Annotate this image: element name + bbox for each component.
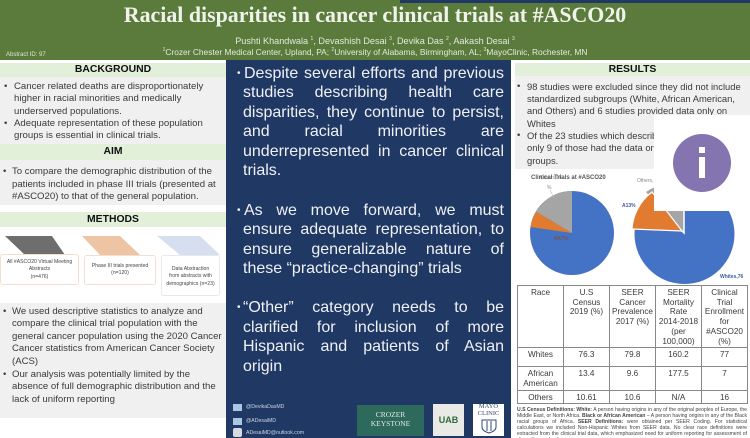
results text: 98 studies were excluded since they did not include xyxy=(527,80,741,92)
aim text: • xyxy=(3,166,6,177)
methods text: absence of full demographic distribution and the xyxy=(12,381,216,392)
panel: left column xyxy=(0,63,226,418)
background text: • xyxy=(4,81,7,92)
leader line xyxy=(550,190,554,198)
results text: • xyxy=(517,80,520,92)
background heading: BACKGROUND xyxy=(75,64,151,75)
aim heading: AIM xyxy=(103,146,123,157)
bullet one: Despite several efforts and previous xyxy=(244,64,504,82)
affiliations: 1Crozer Chester Medical Center, Upland, PA; 2University of Alabama, Birmingham, AL; 3MayoClinic, Rochester, MN xyxy=(163,47,587,57)
data table: 13.4 xyxy=(579,369,594,378)
flow diagram xyxy=(0,236,220,296)
background heading xyxy=(0,63,226,77)
data table: Mortality xyxy=(663,298,694,307)
header banner xyxy=(0,0,750,60)
results heading xyxy=(515,63,750,76)
results heading: RESULTS xyxy=(609,64,656,75)
background text: Adequate representation of these population xyxy=(14,118,203,129)
pie label: AA7% xyxy=(554,236,568,242)
methods text: • xyxy=(3,306,6,316)
aim text: patients included in phase III trials (presented at xyxy=(12,178,216,190)
results text: only 9 of those had the data on all three xyxy=(527,142,692,153)
bullet two: ensure generalizable nature of xyxy=(243,240,504,258)
data table: Prevalence xyxy=(612,307,653,316)
bullet three: • xyxy=(237,302,241,313)
methods text: (ACS) xyxy=(12,356,38,367)
background text: underserved populations. xyxy=(14,106,122,117)
contact block xyxy=(233,404,304,437)
data table: 10.61 xyxy=(576,393,597,402)
data table: Clinical xyxy=(711,288,738,297)
bullet three: origin xyxy=(243,358,282,374)
methods text: general cancer population using the 2020 Cancer xyxy=(12,331,222,342)
logo: crozer keystone: KEYSTONE xyxy=(371,419,410,428)
data table: 7 xyxy=(722,369,727,378)
methods text: We used descriptive statistics to analyze and xyxy=(12,306,203,316)
data table: 177.5 xyxy=(668,369,689,378)
results text: standardized subgroups (White, African American, xyxy=(527,93,735,104)
background text: • xyxy=(4,118,7,129)
methods heading xyxy=(0,212,226,227)
data table: Race xyxy=(531,288,550,297)
data table: 2017 (%) xyxy=(616,317,649,326)
data table: U.S xyxy=(580,288,593,297)
methods text xyxy=(0,303,226,418)
data table: 79.8 xyxy=(625,350,640,359)
bullet one xyxy=(237,64,504,179)
results text: Whites xyxy=(527,118,556,129)
authors: Pushti Khandwala 1, Devashish Desai 3, Devika Das 2, Aakash Desai 3 xyxy=(235,36,515,46)
email address: ADesaiMD@outlook.com xyxy=(246,430,304,436)
panel: results xyxy=(515,63,750,169)
bullet two xyxy=(237,202,504,277)
background text: Cancer related deaths are disproportionately xyxy=(14,81,203,92)
data table: American xyxy=(523,379,558,388)
data table: Cancer xyxy=(619,298,646,307)
bullet one: underrepresented in cancer clinical xyxy=(243,142,504,160)
step 1 box xyxy=(0,254,79,285)
top blue strip xyxy=(400,0,750,3)
data table: SEER xyxy=(621,288,644,297)
icon: twitter two xyxy=(233,418,242,425)
handle one: @DevikaDasMD xyxy=(246,404,284,410)
bullet one: disparities, they continue to persist, xyxy=(243,104,504,120)
results text: • xyxy=(517,130,520,141)
data table: 76.3 xyxy=(579,350,594,359)
background text: groups is essential in clinical trials. xyxy=(14,130,161,141)
popup: info icon xyxy=(654,115,750,211)
data table: Enrollment xyxy=(705,307,744,316)
logo: mayo clinic xyxy=(473,404,504,436)
data table: 160.2 xyxy=(668,350,689,359)
data table: Others xyxy=(528,393,553,402)
bullet three: clarified for inclusion of more xyxy=(243,318,504,336)
data table xyxy=(517,285,748,404)
methods text: Cancer statistics from American Cancer Society xyxy=(12,343,215,354)
step 2 box: (n=120) xyxy=(111,270,129,276)
data table: 100,000) xyxy=(662,337,695,346)
methods heading: METHODS xyxy=(87,214,139,225)
data table: African xyxy=(528,369,553,378)
step shapes xyxy=(5,236,220,255)
results text: groups. xyxy=(527,155,558,166)
logo: uab: UAB xyxy=(439,415,458,425)
aim text xyxy=(0,160,226,205)
chart: clinical trials pie xyxy=(530,174,614,275)
bullet two: As we move forward, we must xyxy=(244,202,504,218)
data table: 2014-2018 xyxy=(659,317,698,326)
bullet three xyxy=(237,299,504,374)
step 3 box: from abstracts with xyxy=(169,273,212,279)
step 3 box: demographics (n=23) xyxy=(166,281,215,287)
data table: N/A xyxy=(672,393,685,402)
bullet two: these “practice-changing” trials xyxy=(243,260,462,277)
data table: (%) xyxy=(718,337,731,346)
logo: uab xyxy=(433,404,464,436)
chart: census pie xyxy=(622,178,744,284)
step 1 box: Abstracts xyxy=(29,266,50,272)
data table: 77 xyxy=(720,350,729,359)
aim text: #ASCO20) to that of the general population. xyxy=(12,191,199,202)
bullet one: • xyxy=(237,68,241,78)
background text: higher in racial minorities and medically xyxy=(14,93,181,104)
chart: clinical trials pie: Others,16 xyxy=(540,175,562,181)
logo: crozer keystone xyxy=(357,405,424,436)
data table: 2019 (%) xyxy=(570,307,603,316)
aim text: To compare the demographic distribution of the xyxy=(12,166,212,177)
handle two: @ADesaiMD xyxy=(246,418,276,424)
results text xyxy=(515,76,750,169)
step 3 box xyxy=(161,255,220,296)
panel: conclusions xyxy=(226,60,511,438)
chart title: Clinical Trials at #ASCO20 xyxy=(531,175,606,181)
bullet two: • xyxy=(237,204,241,216)
title: Racial disparities in cancer clinical trials at #ASCO20 xyxy=(124,2,626,27)
step 1 box: (n=476) xyxy=(31,274,48,280)
pie labels: A13% xyxy=(622,203,636,209)
step 2 box xyxy=(84,255,156,285)
icon: info circle xyxy=(673,134,731,192)
bullet one: trials. xyxy=(243,162,281,179)
methods text: • xyxy=(3,368,6,380)
icon: email xyxy=(233,428,242,437)
data table: 9.6 xyxy=(627,369,638,378)
data table: Trial xyxy=(717,298,732,307)
data table: for xyxy=(720,317,729,326)
aim heading xyxy=(0,144,226,160)
methods text: Our analysis was potentially limited by the xyxy=(12,368,190,380)
bullet one: studies describing health care xyxy=(243,84,504,101)
chart: census pie: Whites,76 xyxy=(720,274,744,280)
icon: twitter xyxy=(233,404,242,411)
bullet three: “Other” category needs to be xyxy=(243,299,504,316)
chart: census pie: Others, xyxy=(637,178,653,184)
abstract id: Abstract ID: 97 xyxy=(6,52,46,58)
logo: crozer keystone: CROZER xyxy=(376,410,405,419)
bullet one: and racial minorities are xyxy=(243,123,504,140)
methods text: lack of uniform reporting xyxy=(12,394,115,405)
bullet three: Hispanic and patients of Asian xyxy=(243,338,504,355)
data table: 16 xyxy=(720,393,729,402)
results text: and Others) and 6 studies provided data only on xyxy=(527,105,727,116)
data table: #ASCO20 xyxy=(706,327,743,336)
step 2 box: Phase III trials presented xyxy=(92,263,148,269)
data table: Census xyxy=(573,298,600,307)
step 1 box: All #ASCO20 Virtual Meeting xyxy=(7,259,72,265)
logo: mayo clinic: MAYO xyxy=(479,403,498,410)
data table: Rate xyxy=(670,307,687,316)
data table: 10.6 xyxy=(625,393,640,402)
methods text: compare the clinical trial population with the xyxy=(12,318,198,329)
logo: mayo clinic: CLINIC xyxy=(478,410,499,416)
background text xyxy=(0,77,226,144)
data table: SEER xyxy=(667,288,690,297)
step 3 box: Data Abstraction xyxy=(172,266,209,272)
bullet two: ensure adequate representation, to xyxy=(243,221,504,238)
data table: (per xyxy=(671,327,686,336)
data table: Whites xyxy=(528,350,553,359)
results text: Of the 23 studies which described race/ethnicity, xyxy=(527,130,727,141)
others label: % xyxy=(547,185,552,191)
